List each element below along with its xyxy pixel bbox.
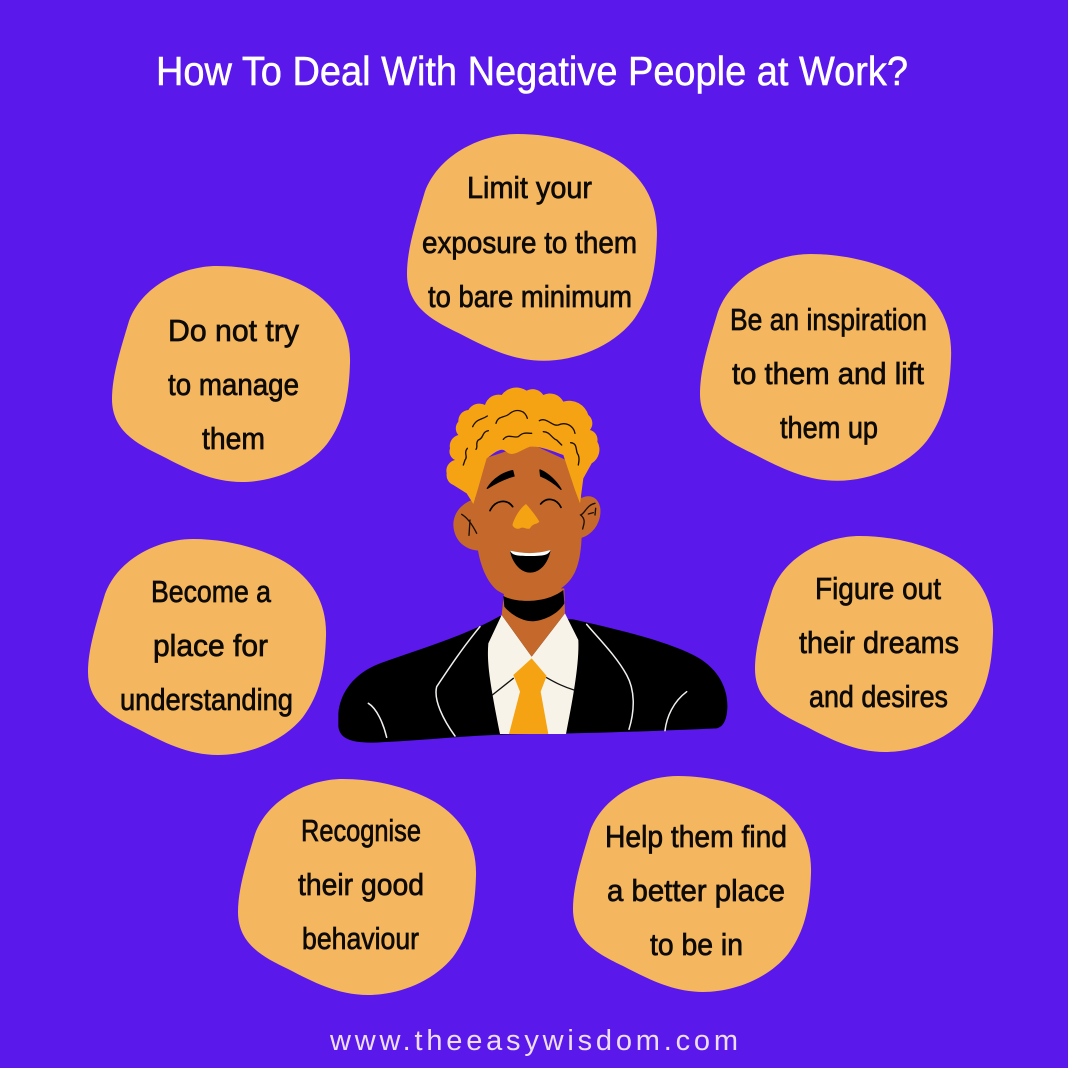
- eyebrows: [487, 470, 561, 489]
- website footer: www.theeasywisdom.com: [329, 1025, 738, 1057]
- nose: [513, 504, 539, 529]
- bubble: recognise good behaviour: Recognise: [301, 813, 421, 848]
- face: [475, 443, 582, 599]
- bubble: recognise good behaviour: behaviour: [302, 921, 419, 956]
- mouth: [510, 550, 551, 573]
- jacket: [338, 616, 727, 743]
- ear details: [462, 503, 596, 535]
- bubble: help find better place: [573, 776, 811, 992]
- bubble: do not manage: them: [202, 421, 265, 456]
- hair curls: [463, 411, 579, 465]
- bubble: do not manage: Do not try: [168, 313, 299, 348]
- collar and lapel lines: [368, 624, 687, 737]
- bubble: be an inspiration: to them and lift: [732, 356, 924, 391]
- hair: [446, 388, 599, 504]
- bubble: be an inspiration: them up: [780, 410, 878, 445]
- bubble: recognise good behaviour: [238, 779, 476, 995]
- bubble: figure out dreams: [755, 536, 993, 752]
- bubble: help find better place: Help them find: [605, 819, 787, 854]
- bubble: limit exposure: Limit your: [467, 170, 592, 205]
- teeth: [510, 550, 551, 556]
- illustration: smiling man in suit: [338, 388, 727, 743]
- bubble: do not manage: to manage: [168, 367, 299, 402]
- bubble: limit exposure: exposure to them: [422, 225, 637, 260]
- bubble: figure out dreams: and desires: [809, 679, 948, 714]
- bubble: recognise good behaviour: their good: [298, 867, 424, 902]
- shirt: [488, 613, 578, 734]
- bubble: be an inspiration: [700, 254, 951, 481]
- title: How To Deal With Negative People at Work?: [156, 48, 908, 94]
- bubble: become a place for understanding: [88, 539, 326, 755]
- bubble: become a place for understanding: understanding: [120, 682, 293, 717]
- bubble: figure out dreams: Figure out: [815, 571, 941, 606]
- bubble: help find better place: to be in: [650, 927, 743, 962]
- bubble: help find better place: a better place: [607, 873, 785, 908]
- bubble: become a place for understanding: Become a: [151, 574, 272, 609]
- neck shadow: [503, 590, 564, 621]
- bubble: do not manage: [112, 266, 350, 482]
- bubble: become a place for understanding: place for: [153, 628, 268, 663]
- bubble: be an inspiration: Be an inspiration: [730, 302, 927, 337]
- tie: [509, 658, 548, 734]
- bubble: limit exposure: to bare minimum: [428, 279, 632, 314]
- neck: [502, 588, 565, 657]
- closed eyes: [490, 499, 561, 511]
- bubble: limit exposure: [407, 134, 657, 361]
- bubble: figure out dreams: their dreams: [799, 625, 959, 660]
- ears: [453, 496, 600, 551]
